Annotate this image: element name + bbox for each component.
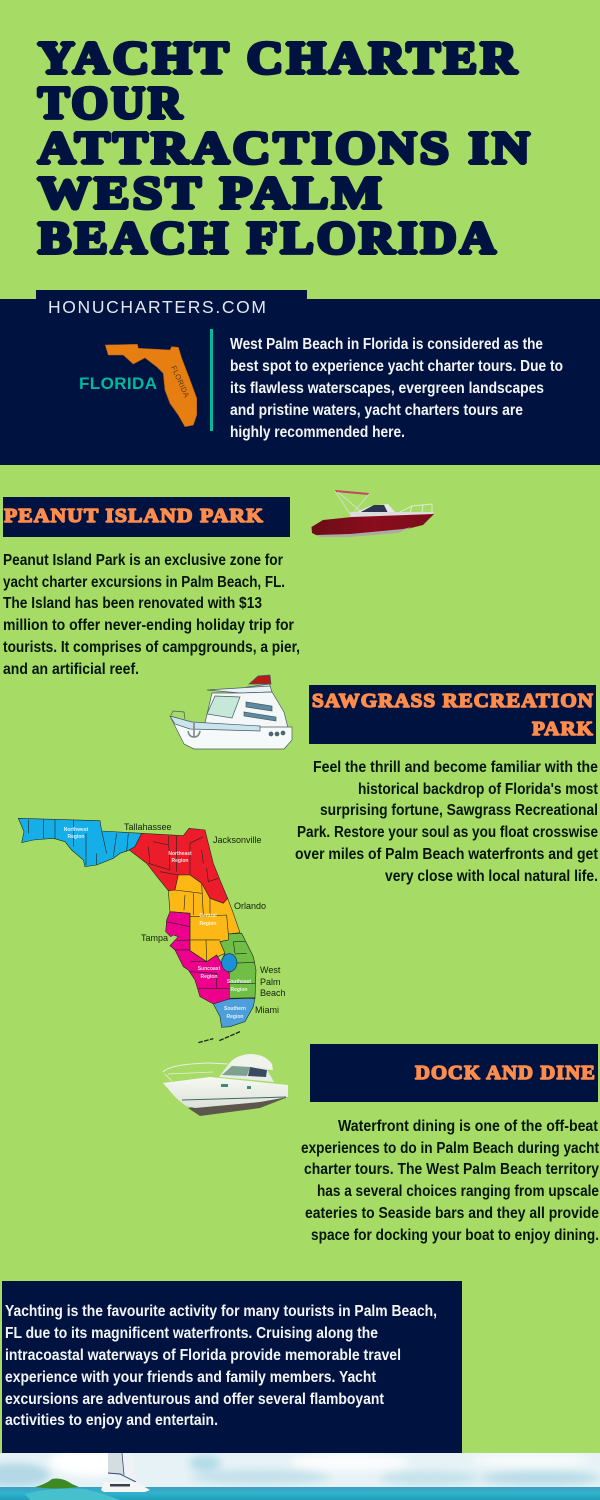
heading: Sawgrass Recreation Park [309, 685, 596, 744]
title: WEST PALM [38, 167, 385, 218]
text: Sawgrass Recreation Park [295, 759, 598, 885]
heading: Sawgrass Recreation Park: SAWGRASS RECREATION [312, 690, 594, 712]
region labels: Central [199, 913, 217, 919]
city labels: Miami [255, 1005, 279, 1015]
city labels [124, 822, 286, 1015]
region: Central [168, 875, 240, 962]
florida keys [198, 1032, 240, 1043]
region labels: Region [200, 921, 216, 927]
region: Southern [213, 998, 255, 1027]
heading: Peanut Island Park: PEANUT ISLAND PARK [4, 505, 264, 527]
title: ATTRACTIONS IN [38, 122, 533, 173]
title: YACHT CHARTER [38, 32, 520, 83]
city labels: Palm [260, 977, 281, 987]
Florida label: FLORIDA [79, 374, 157, 393]
lake Okeechobee [222, 954, 237, 972]
panel: summary: activities to enjoy and entertain. [5, 1412, 218, 1429]
icon: red speedboat [312, 491, 434, 537]
panel: summary: FL due to its magnificent waterfronts. Cruising along the [5, 1325, 378, 1342]
region labels: Northwest [64, 827, 89, 833]
text: Peanut Island Park: million to offer never-ending holiday trip for [3, 617, 294, 634]
panel: intro [0, 290, 600, 465]
city labels: Tampa [141, 933, 168, 943]
region labels [64, 827, 251, 1020]
region: Northeast [129, 828, 228, 903]
text: Peanut Island Park: tourists. It comprises of campgrounds, a pier, [3, 639, 300, 656]
text: Peanut Island Park [3, 552, 300, 678]
intro text [230, 336, 563, 441]
intro text: best spot to experience yacht charter tours. Due to [230, 358, 563, 375]
heading: Sawgrass Recreation Park: PARK [532, 718, 594, 740]
region: Suncoast [166, 912, 229, 1004]
intro text: its flawless waterscapes, evergreen landscapes [230, 380, 544, 397]
county lines [28, 819, 255, 988]
panel: summary: excursions are adventurous and offer several flamboyant [5, 1391, 384, 1408]
panel: summary: experience with your friends and family members. Yacht [5, 1369, 376, 1386]
intro text: highly recommended here. [230, 424, 405, 441]
region: Southeast [220, 933, 256, 998]
region labels: Southeast [227, 979, 251, 985]
icon: Florida orange map: FLORIDA [169, 364, 191, 399]
icon: Florida orange map [105, 344, 197, 427]
region labels: Region [231, 987, 247, 993]
island [25, 1489, 120, 1500]
region labels: Region [68, 834, 84, 840]
catamaran [108, 1453, 124, 1475]
heading: Dock and Dine: DOCK AND DINE [415, 1062, 596, 1084]
city labels: Beach [260, 988, 286, 998]
text: Peanut Island Park: The Island has been renovated with $13 [3, 595, 262, 612]
region labels: Region [201, 974, 217, 980]
map: Florida regions [18, 818, 286, 1043]
region: Northwest [18, 818, 142, 867]
panel: summary: Yachting is the favourite activity for many tourists in Palm Beach, [5, 1303, 437, 1320]
city labels: Orlando [234, 901, 266, 911]
text: Peanut Island Park: Peanut Island Park is an exclusive zone for [3, 552, 283, 569]
icon: white yacht [170, 675, 292, 749]
city labels: Jacksonville [213, 835, 262, 845]
intro text: West Palm Beach in Florida is considered as the [230, 336, 543, 353]
icon: white motor yacht [163, 1054, 288, 1116]
heading: Dock and Dine [310, 1044, 598, 1102]
region labels: Region [227, 1014, 243, 1020]
title [38, 32, 533, 263]
panel: summary: intracoastal waterways of Florida provide memorable travel [5, 1347, 401, 1364]
footer: seascape photo [0, 1453, 600, 1500]
region labels: Suncoast [198, 966, 221, 972]
title: BEACH FLORIDA [38, 212, 499, 263]
text: Peanut Island Park: yacht charter excursions in Palm Beach, FL. [3, 574, 285, 591]
intro text: and pristine waters, yacht charters tours are [230, 402, 523, 419]
region labels: Region [172, 858, 188, 864]
heading: Peanut Island Park [3, 497, 290, 537]
text: Peanut Island Park: and an artificial reef. [3, 661, 139, 678]
panel: summary [2, 1281, 462, 1453]
text: Dock and Dine [301, 1118, 599, 1244]
city labels: Tallahassee [124, 822, 172, 832]
region labels: Northeast [168, 851, 192, 857]
title: TOUR [38, 77, 185, 128]
region labels: Southern [224, 1006, 246, 1012]
website label: HONUCHARTERS.COM [48, 297, 266, 317]
city labels: West [260, 965, 281, 975]
